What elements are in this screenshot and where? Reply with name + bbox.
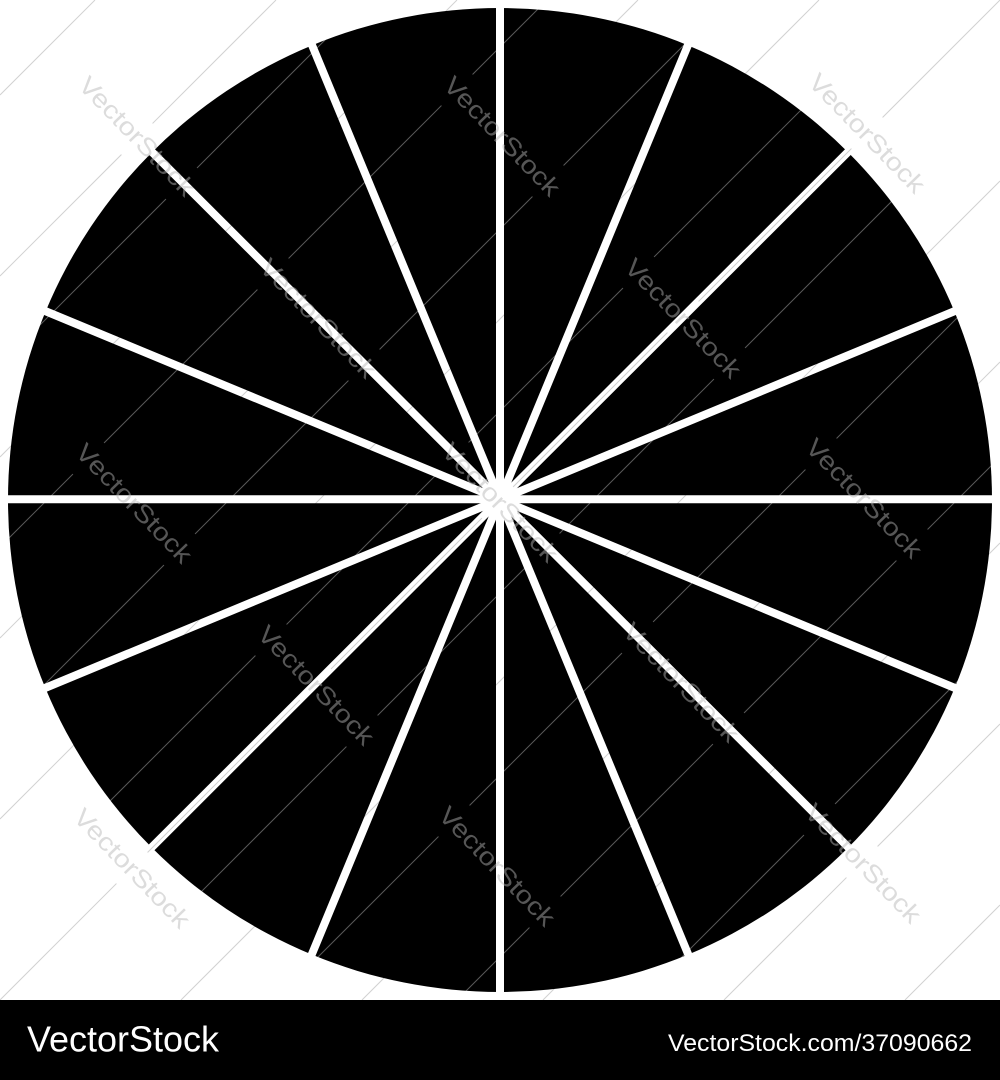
watermarks: VectorStock xyxy=(619,253,747,385)
watermarks: VectorStock xyxy=(68,803,196,935)
watermarks: VectorStock xyxy=(799,798,927,930)
watermarks xyxy=(68,68,931,935)
watermarks: VectorStock xyxy=(617,617,745,749)
watermarks: VectorStock xyxy=(436,437,564,569)
footer image id: VectorStock.com/37090662 xyxy=(668,1030,972,1057)
footer bar xyxy=(0,1000,1000,1080)
watermarks: VectorStock xyxy=(803,68,931,200)
centre hub xyxy=(481,480,519,518)
watermarks: VectorStock xyxy=(800,433,928,565)
footer brand name: VectorStock xyxy=(27,1018,220,1060)
watermarks: VectorStock xyxy=(254,253,382,385)
watermarks: VectorStock xyxy=(252,620,380,752)
watermarks: VectorStock xyxy=(70,438,198,570)
watermarks: VectorStock xyxy=(438,71,566,203)
watermarks: VectorStock xyxy=(73,71,201,203)
watermarks: VectorStock xyxy=(433,801,561,933)
